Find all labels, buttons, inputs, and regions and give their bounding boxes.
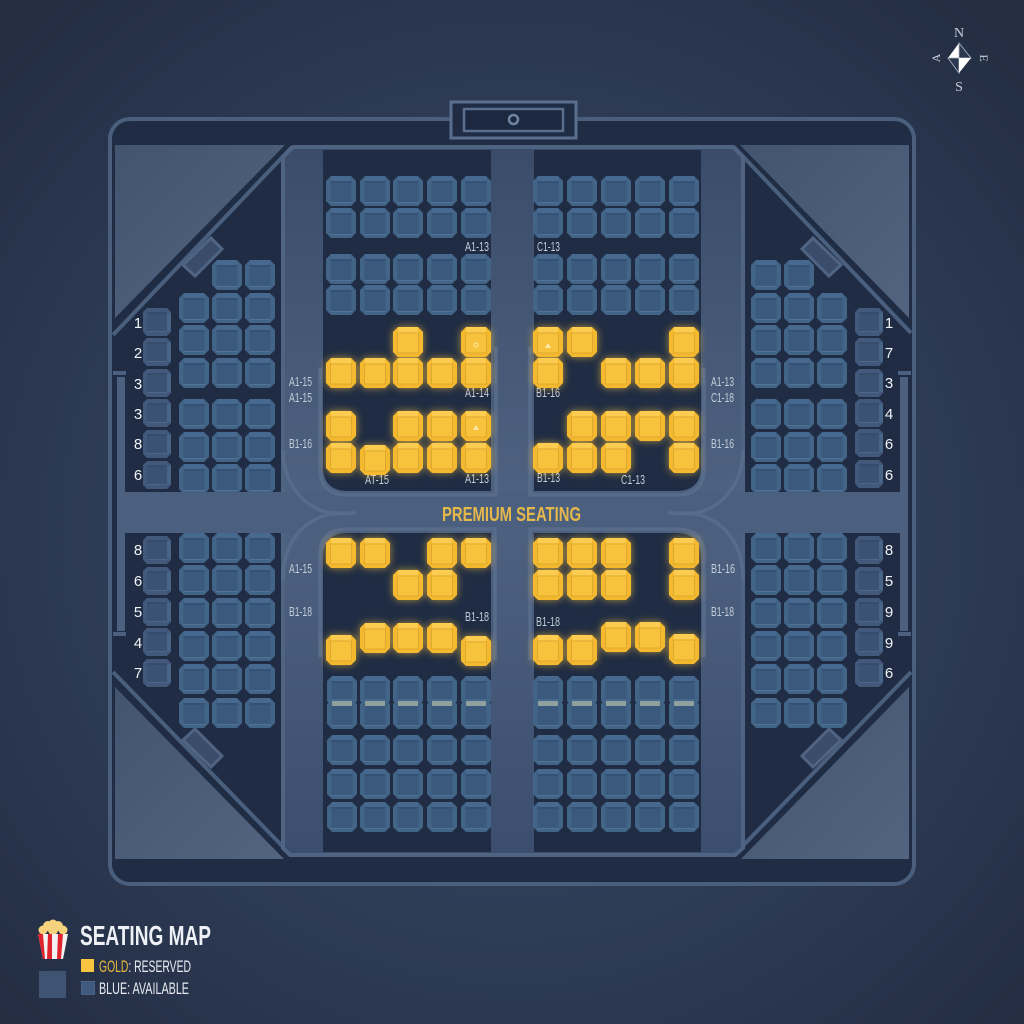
seats: centre top blue right: [533, 176, 699, 315]
row numbers left: 8: [134, 436, 142, 453]
premium seating heading: PREMIUM SEATING: [442, 504, 581, 526]
row numbers left: 3: [134, 406, 142, 423]
seat labels: B1-16: [536, 386, 560, 400]
cross aisle: [125, 492, 900, 533]
seat labels: C1-13: [537, 240, 560, 254]
legend: large swatch: [39, 971, 66, 998]
compass: [929, 26, 991, 95]
seat labels: A1-15: [289, 375, 312, 389]
central seating block with aisles: [283, 147, 743, 855]
seat labels: A1-15: [289, 391, 312, 405]
legend: blue available: BLUE: AVAILABLE: [99, 980, 189, 998]
row numbers right: 5: [885, 573, 893, 590]
auditorium frame: [110, 119, 914, 884]
seat labels: B1-18: [711, 605, 734, 619]
seat labels: B1-18: [289, 605, 312, 619]
row numbers left: 1: [134, 315, 142, 332]
side strip left: [113, 371, 126, 636]
seats: centre bottom blue right: [533, 676, 699, 832]
title: SEATING MAP: [80, 920, 211, 951]
row numbers left: 8: [134, 542, 142, 559]
seat labels: A1-13: [465, 472, 489, 486]
screen stage: [451, 102, 576, 138]
seats: gold reserved bottom left: [326, 538, 491, 666]
seats: right lower section: [751, 533, 883, 728]
row numbers right: 9: [885, 604, 893, 621]
seat labels: A1-13: [465, 240, 489, 254]
row numbers left: [134, 315, 142, 682]
seat labels: AT-15: [365, 473, 389, 487]
compass: N: [954, 26, 964, 41]
seats: right upper section: [751, 260, 883, 494]
corner tabs: [183, 238, 841, 767]
side strip right: [898, 371, 911, 636]
seat labels: A1-14: [465, 386, 489, 400]
seat labels: [289, 240, 735, 629]
corner triangle: top right: [740, 145, 909, 318]
row numbers right: 8: [885, 542, 893, 559]
row numbers left: 3: [134, 376, 142, 393]
compass: E: [977, 54, 991, 62]
corner triangle: bottom left: [115, 687, 284, 859]
row numbers left: 6: [134, 573, 142, 590]
row numbers left: 5: [134, 604, 142, 621]
seat labels: A1-13: [711, 375, 734, 389]
row numbers right: 4: [885, 406, 893, 423]
seats: left upper section: [143, 260, 275, 494]
row numbers left: 6: [134, 467, 142, 484]
seats: left lower section: [143, 533, 275, 728]
seat labels: B1-16: [711, 562, 735, 576]
seat labels: B1-13: [537, 471, 560, 485]
aisle curved guide lines: [283, 347, 743, 660]
seat labels: A1-15: [289, 562, 312, 576]
row numbers right: 6: [885, 436, 893, 453]
corner triangle: top left: [115, 145, 285, 318]
row numbers right: 1: [885, 315, 893, 332]
row numbers left: 2: [134, 345, 142, 362]
corner triangle: bottom right: [741, 687, 909, 859]
row numbers right: 6: [885, 665, 893, 682]
seats: centre top blue left: [326, 176, 491, 315]
legend: blue available: [82, 980, 189, 998]
seat labels: B1-16: [711, 437, 734, 451]
seat labels: B1-18: [465, 610, 489, 624]
row numbers right: 6: [885, 467, 893, 484]
row numbers left: 4: [134, 635, 142, 652]
legend: gold reserved: [81, 958, 191, 976]
seat labels: C1-13: [621, 473, 645, 487]
seats: gold reserved top left: [326, 327, 491, 475]
row numbers left: 7: [134, 665, 142, 682]
seats: gold reserved top right: [533, 327, 699, 473]
seat labels: B1-18: [536, 615, 560, 629]
legend: gold reserved: GOLD: RESERVED: [99, 958, 191, 976]
seat labels: B1-16: [289, 437, 312, 451]
icon: popcorn: [38, 920, 68, 959]
compass: S: [955, 80, 963, 95]
seats: centre bottom blue left: [327, 676, 491, 832]
row numbers right: 9: [885, 635, 893, 652]
compass: A: [929, 53, 943, 62]
seat labels: C1-18: [711, 391, 734, 405]
row numbers right: 7: [885, 345, 893, 362]
row numbers right: [885, 315, 893, 682]
row numbers right: 3: [885, 375, 893, 392]
seats: gold reserved bottom right: [533, 538, 699, 665]
